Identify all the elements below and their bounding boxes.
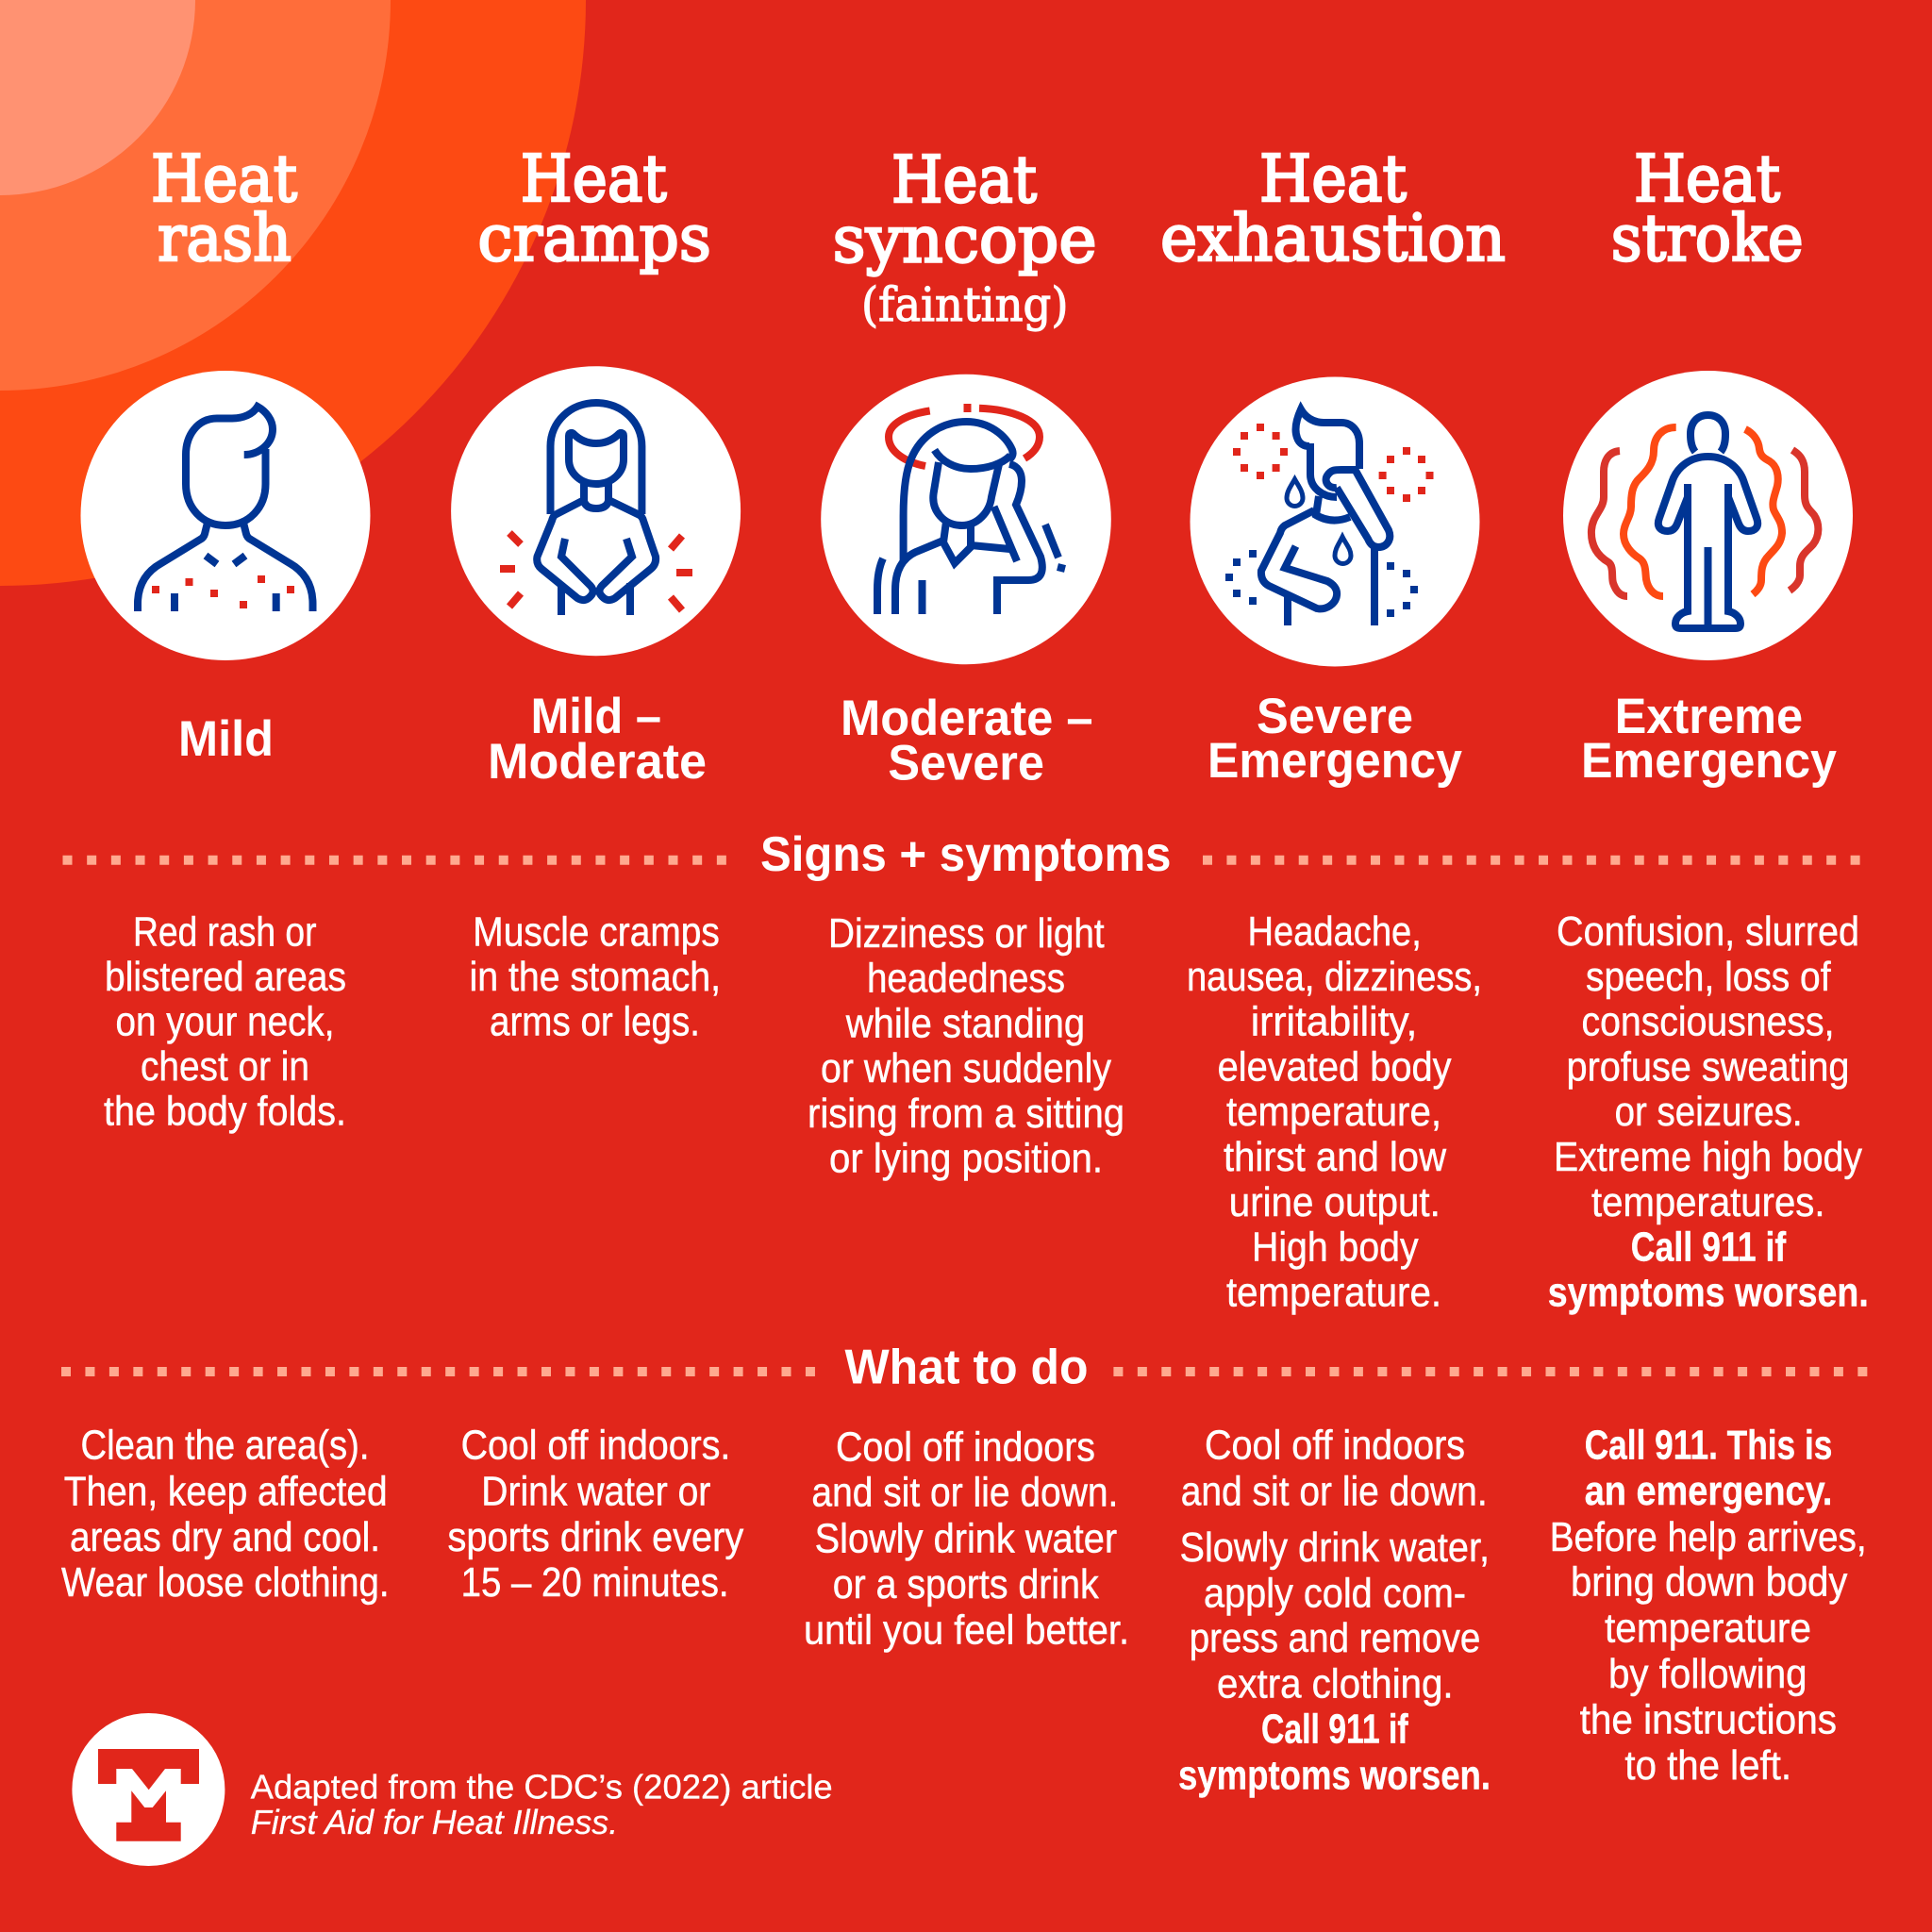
what to do: heat exhaustion: press and remove <box>1190 1615 1480 1661</box>
heading: heat cramps <box>477 142 711 276</box>
what to do: heat rash: Then, keep affected <box>64 1469 388 1515</box>
severity: mild: Mild <box>178 711 274 767</box>
what to do: heat rash: Clean the area(s). <box>81 1423 370 1469</box>
panel: heat cramps <box>447 142 743 1606</box>
symptoms: heat stroke: speech, loss of <box>1586 954 1831 1000</box>
symptoms: heat cramps: in the stomach, <box>470 954 721 1000</box>
icon: woman feeling dizzy <box>821 375 1111 664</box>
what to do: heat syncope: and sit or lie down. <box>811 1470 1118 1516</box>
symptoms: heat exhaustion: temperature, <box>1226 1089 1441 1135</box>
severity: moderate to severe: Severe <box>888 736 1044 791</box>
what to do: heat syncope: until you feel better. <box>804 1607 1129 1653</box>
symptoms: heat rash: Red rash or <box>133 909 317 956</box>
symptoms: heat stroke: Extreme high body <box>1554 1134 1862 1180</box>
what to do: heat cramps: Drink water or <box>481 1469 710 1515</box>
severity: moderate to severe: Moderate – <box>841 691 1093 746</box>
what to do: heat cramps <box>447 1423 743 1606</box>
symptoms: heat syncope: or lying position. <box>829 1136 1103 1181</box>
heading: heat cramps: Heat <box>521 142 667 217</box>
symptoms: heat rash: blistered areas <box>105 954 346 1000</box>
what to do: heat stroke <box>1550 1423 1867 1789</box>
symptoms: heat exhaustion <box>1187 908 1482 1315</box>
logo: white circle with M mark <box>72 1713 225 1866</box>
icon: woman holding stomach <box>451 366 741 656</box>
what to do: heat stroke: an emergency. <box>1585 1468 1832 1514</box>
symptoms: heat rash: chest or in <box>141 1043 309 1090</box>
symptoms: heat cramps <box>470 909 721 1044</box>
what to do: heat exhaustion: extra clothing. <box>1217 1660 1454 1707</box>
icon: man with rash on chest <box>81 371 370 660</box>
what to do: heat rash <box>61 1423 390 1606</box>
source credit <box>251 1768 833 1841</box>
what to do: heat exhaustion: Slowly drink water, <box>1179 1524 1490 1571</box>
heading: heat syncope (fainting): syncope <box>833 203 1097 277</box>
what to do: heat stroke: temperature <box>1605 1606 1811 1652</box>
symptoms: heat syncope: rising from a sitting <box>808 1091 1124 1137</box>
heading: heat syncope (fainting): Heat <box>891 143 1037 218</box>
symptoms: heat exhaustion: High body <box>1252 1224 1419 1271</box>
panel: heat rash <box>61 142 390 1606</box>
symptoms: heat exhaustion: irritability, <box>1251 999 1417 1045</box>
symptoms: heat exhaustion: Headache, <box>1247 908 1422 955</box>
heading: heat stroke <box>1611 142 1804 276</box>
severity: mild to moderate <box>488 689 707 790</box>
what to do: heat cramps: sports drink every <box>447 1514 743 1560</box>
section heading: what to do: What to do <box>845 1341 1089 1395</box>
severity: severe emergency: Emergency <box>1208 733 1462 789</box>
what to do: heat stroke: the instructions <box>1580 1697 1837 1743</box>
symptoms: heat cramps: Muscle cramps <box>473 909 720 956</box>
what to do: heat stroke: Before help arrives, <box>1550 1514 1867 1560</box>
symptoms: heat rash: on your neck, <box>115 998 334 1044</box>
symptoms: heat rash <box>104 909 346 1135</box>
what to do: heat cramps: Cool off indoors. <box>461 1423 730 1469</box>
what to do: heat exhaustion: Call 911 if <box>1261 1707 1408 1753</box>
heading: heat exhaustion <box>1160 142 1506 276</box>
severity: extreme emergency <box>1581 689 1837 789</box>
severity: severe emergency <box>1208 689 1462 789</box>
what to do: heat syncope: Slowly drink water <box>815 1516 1117 1562</box>
heading: heat exhaustion: Heat <box>1259 142 1407 217</box>
section heading: signs and symptoms: Signs + symptoms <box>760 827 1172 882</box>
what to do: heat stroke: Call 911. This is <box>1585 1423 1832 1469</box>
symptoms: heat exhaustion: thirst and low <box>1224 1134 1446 1180</box>
heading: heat rash: Heat <box>151 142 297 217</box>
severity: extreme emergency: Emergency <box>1581 733 1837 789</box>
severity: severe emergency: Severe <box>1257 689 1413 744</box>
symptoms: heat stroke: or seizures. <box>1615 1089 1803 1135</box>
severity: extreme emergency: Extreme <box>1615 689 1803 744</box>
heading: heat syncope (fainting): (fainting) <box>861 277 1068 332</box>
symptoms: heat rash: the body folds. <box>104 1089 346 1135</box>
symptoms: heat stroke: profuse sweating <box>1566 1043 1849 1090</box>
heading: heat rash <box>151 142 297 276</box>
what to do: heat exhaustion: symptoms worsen. <box>1178 1753 1491 1799</box>
what to do: heat exhaustion: and sit or lie down. <box>1181 1468 1488 1514</box>
what to do: heat rash: Wear loose clothing. <box>61 1559 390 1606</box>
symptoms: heat cramps: arms or legs. <box>490 998 700 1044</box>
source credit: Adapted from the CDC’s (2022) article <box>251 1768 833 1807</box>
icon: man sweating and holding head <box>1191 377 1479 666</box>
severity: mild to moderate: Mild – <box>531 689 661 744</box>
source credit: First Aid for Heat Illness. <box>251 1803 618 1841</box>
panel: heat syncope <box>804 143 1129 1653</box>
what to do: heat exhaustion <box>1178 1423 1491 1799</box>
symptoms: heat exhaustion: temperature. <box>1226 1269 1441 1315</box>
symptoms: heat exhaustion: elevated body <box>1218 1043 1452 1090</box>
heading: heat syncope (fainting) <box>833 143 1097 332</box>
symptoms: heat stroke <box>1548 908 1869 1315</box>
what to do: heat syncope <box>804 1424 1129 1653</box>
what to do: heat exhaustion: apply cold com- <box>1204 1570 1466 1616</box>
heading: heat stroke: Heat <box>1634 142 1780 217</box>
what to do: heat rash: areas dry and cool. <box>70 1514 380 1560</box>
symptoms: heat exhaustion: urine output. <box>1229 1179 1441 1225</box>
symptoms: heat stroke: temperatures. <box>1591 1179 1824 1225</box>
panel: heat exhaustion <box>1160 142 1506 1799</box>
symptoms: heat stroke: consciousness, <box>1581 999 1834 1045</box>
symptoms: heat stroke: Call 911 if <box>1631 1224 1787 1271</box>
icon: person radiating heat <box>1563 371 1853 660</box>
what to do: heat stroke: to the left. <box>1624 1742 1791 1789</box>
symptoms: heat stroke: Confusion, slurred <box>1557 908 1859 955</box>
what to do: heat stroke: bring down body <box>1571 1559 1847 1606</box>
symptoms: heat syncope: while standing <box>845 1000 1085 1046</box>
heading: heat stroke: stroke <box>1611 202 1804 276</box>
panel: heat stroke <box>1548 142 1869 1789</box>
symptoms: heat stroke: symptoms worsen. <box>1548 1269 1869 1315</box>
symptoms: heat syncope: or when suddenly <box>821 1045 1111 1091</box>
heading: heat rash: rash <box>158 202 291 276</box>
sun graphic: concentric quarter circles <box>0 0 586 586</box>
what to do: heat cramps: 15 – 20 minutes. <box>461 1559 729 1606</box>
symptoms: heat syncope: headedness <box>867 956 1065 1002</box>
symptoms: heat syncope: Dizziness or light <box>828 910 1105 957</box>
what to do: heat syncope: Cool off indoors <box>836 1424 1095 1471</box>
what to do: heat exhaustion: Cool off indoors <box>1205 1423 1465 1469</box>
heading: heat exhaustion: exhaustion <box>1160 202 1506 276</box>
what to do: heat syncope: or a sports drink <box>833 1561 1100 1607</box>
symptoms: heat syncope <box>808 910 1124 1181</box>
what to do: heat stroke: by following <box>1608 1651 1807 1697</box>
heading: heat cramps: cramps <box>477 202 711 276</box>
severity: moderate to severe <box>841 691 1093 791</box>
severity: mild to moderate: Moderate <box>488 734 707 790</box>
symptoms: heat exhaustion: nausea, dizziness, <box>1187 954 1482 1000</box>
